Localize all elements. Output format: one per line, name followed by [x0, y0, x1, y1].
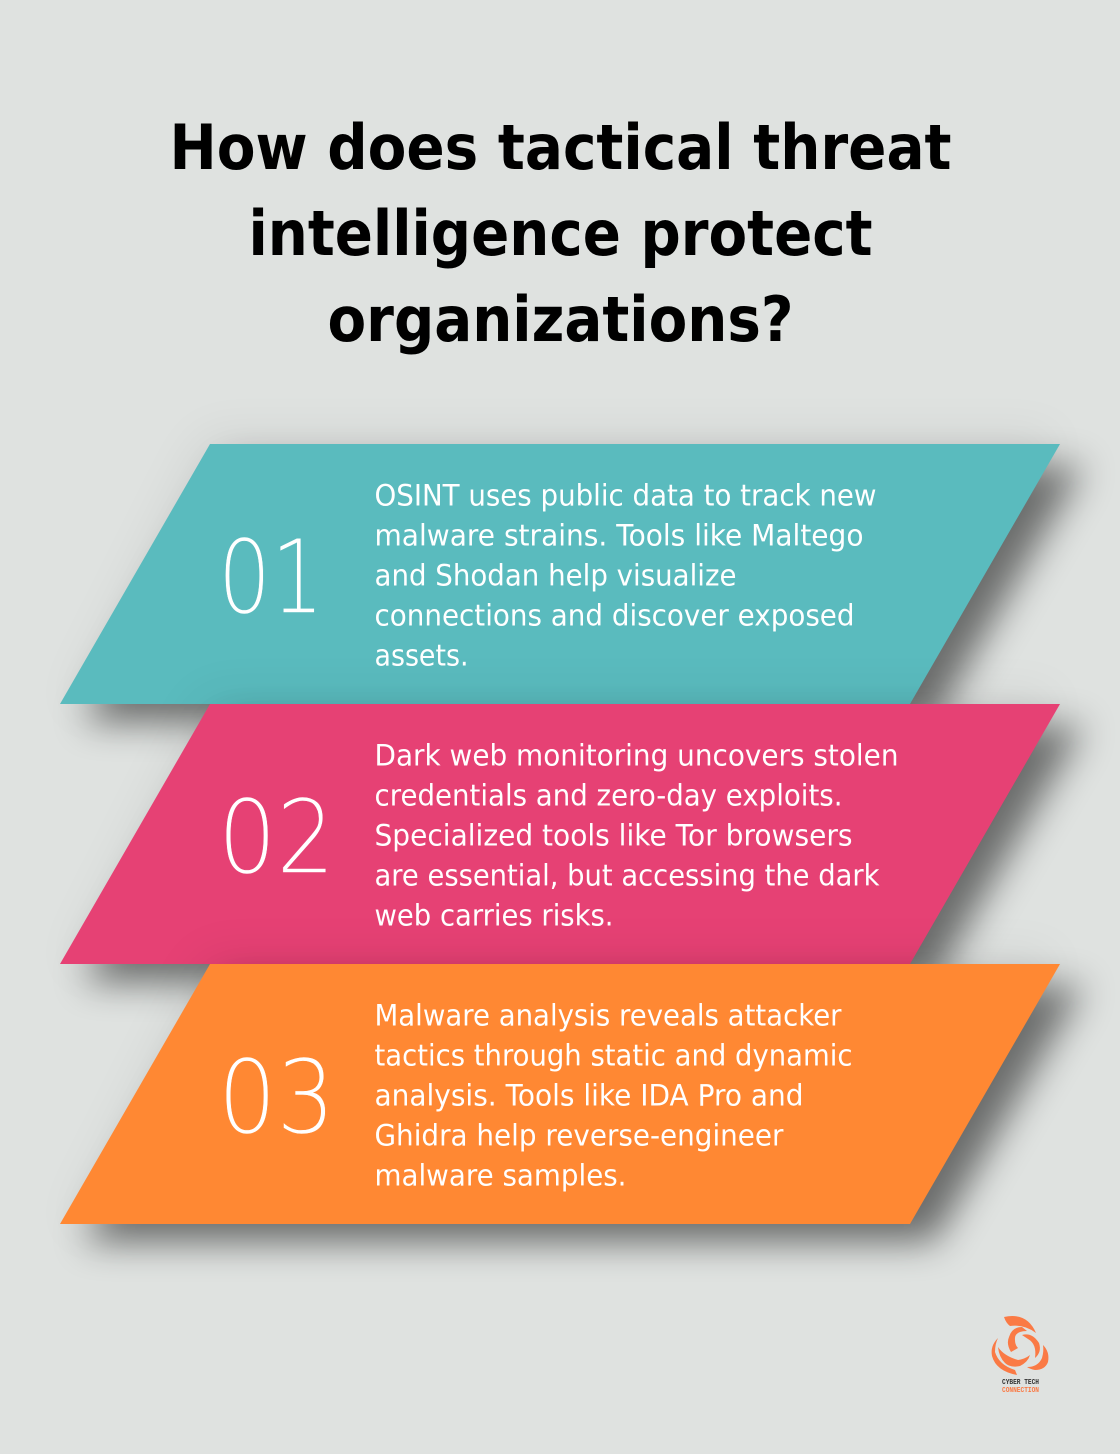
logo text: connection: CONNECTION: [1002, 1387, 1039, 1395]
panel: step 02: [60, 692, 1084, 982]
text: malware analysis: [374, 998, 852, 1192]
text: OSINT: malware strains. Tools like Maltego: [374, 518, 864, 552]
text: OSINT: assets.: [374, 638, 468, 672]
number 02: 02: [218, 778, 335, 898]
title: How does tactical threat: [170, 111, 952, 184]
text: dark web: credentials and zero-day exploits.: [374, 778, 842, 812]
title: organizations?: [328, 283, 794, 356]
text: dark web: Dark web monitoring uncovers stolen: [374, 738, 898, 772]
text: dark web: web carries risks.: [374, 898, 614, 932]
number 03: 03: [218, 1038, 335, 1158]
text: malware analysis: Ghidra help reverse-engineer: [374, 1118, 784, 1152]
panel: step 03: [60, 952, 1084, 1242]
text: malware analysis: analysis. Tools like IDA Pro and: [374, 1078, 804, 1112]
title: intelligence protect: [248, 197, 872, 270]
text: dark web: Specialized tools like Tor browsers: [374, 818, 852, 852]
text: dark web: are essential, but accessing the dark: [374, 858, 880, 892]
text: OSINT: OSINT uses public data to track new: [374, 478, 876, 512]
text: OSINT: connections and discover exposed: [374, 598, 854, 632]
text: malware analysis: Malware analysis reveals attacker: [374, 998, 842, 1032]
text: malware analysis: malware samples.: [374, 1158, 626, 1192]
logo: Cyber Tech Connection: [992, 1316, 1048, 1395]
text: OSINT: [374, 478, 876, 672]
icon: tri-swirl mark: [992, 1316, 1048, 1375]
text: OSINT: and Shodan help visualize: [374, 558, 736, 592]
logo text: cyber tech: CYBER TECH: [1002, 1379, 1039, 1387]
title: [170, 111, 952, 356]
text: dark web: [374, 738, 898, 932]
panel: step 01: [60, 432, 1084, 722]
text: malware analysis: tactics through static and dynamic: [374, 1038, 852, 1072]
number 01: 01: [218, 518, 324, 638]
